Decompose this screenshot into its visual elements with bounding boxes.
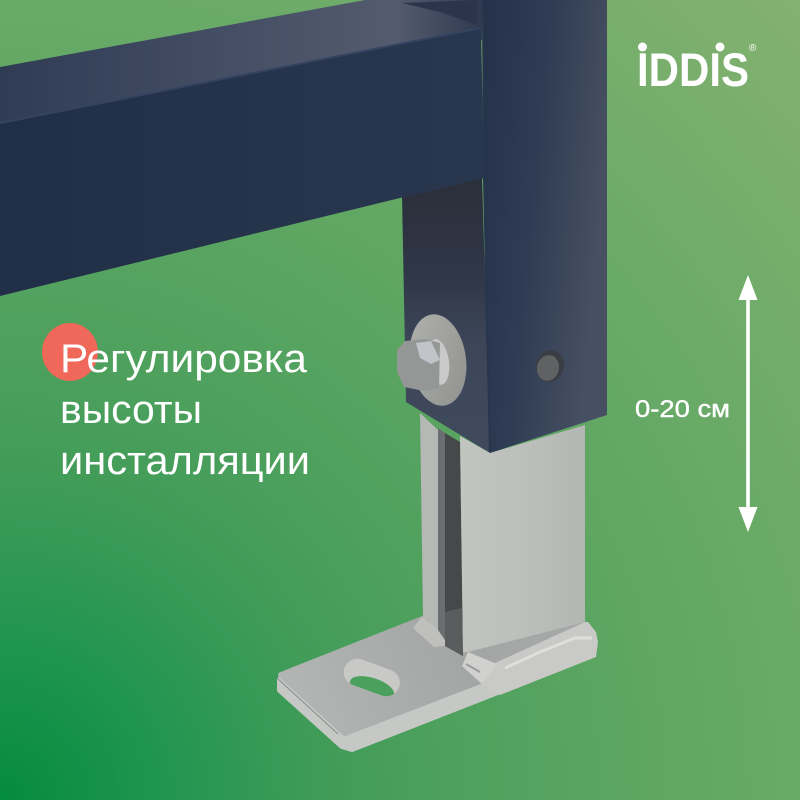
installation frame <box>0 0 607 453</box>
flange weld <box>413 616 445 647</box>
coral accent blob <box>42 323 98 381</box>
adjustment hole <box>533 347 567 385</box>
post front face <box>482 0 607 453</box>
bar top edge highlight <box>0 28 481 123</box>
tube weld band <box>482 622 598 695</box>
post left side face <box>402 175 490 453</box>
gap lower part <box>445 608 463 656</box>
foot base plate edge <box>280 640 594 749</box>
flange textured edge <box>438 428 445 646</box>
height label: 0-20 см <box>635 396 730 423</box>
dark gap <box>445 433 463 656</box>
post corner edge <box>483 0 490 453</box>
horizontal bar top face <box>0 0 482 135</box>
title <box>60 337 310 483</box>
slotted hole <box>344 658 400 696</box>
weld highlight <box>505 638 592 668</box>
weld detail <box>402 0 478 25</box>
bolt assembly <box>397 311 472 409</box>
plate edge line <box>277 678 338 734</box>
bolt head <box>397 339 440 391</box>
foot base plate top <box>281 612 592 733</box>
title: Регулировка <box>60 337 308 381</box>
side flange <box>420 413 438 640</box>
tube weld blob <box>462 652 497 684</box>
bolt facet <box>416 341 440 364</box>
title: высоты <box>60 388 202 432</box>
title: инсталляции <box>60 439 310 483</box>
washer <box>404 311 472 409</box>
horizontal bar front face <box>0 28 484 296</box>
square tube <box>460 425 585 652</box>
arrow: height range <box>738 275 758 532</box>
logo: IDDIS <box>637 43 749 96</box>
logo: ® <box>749 43 757 54</box>
telescopic foot <box>277 413 598 749</box>
spring ring <box>424 338 452 386</box>
weld shadow <box>466 664 480 672</box>
